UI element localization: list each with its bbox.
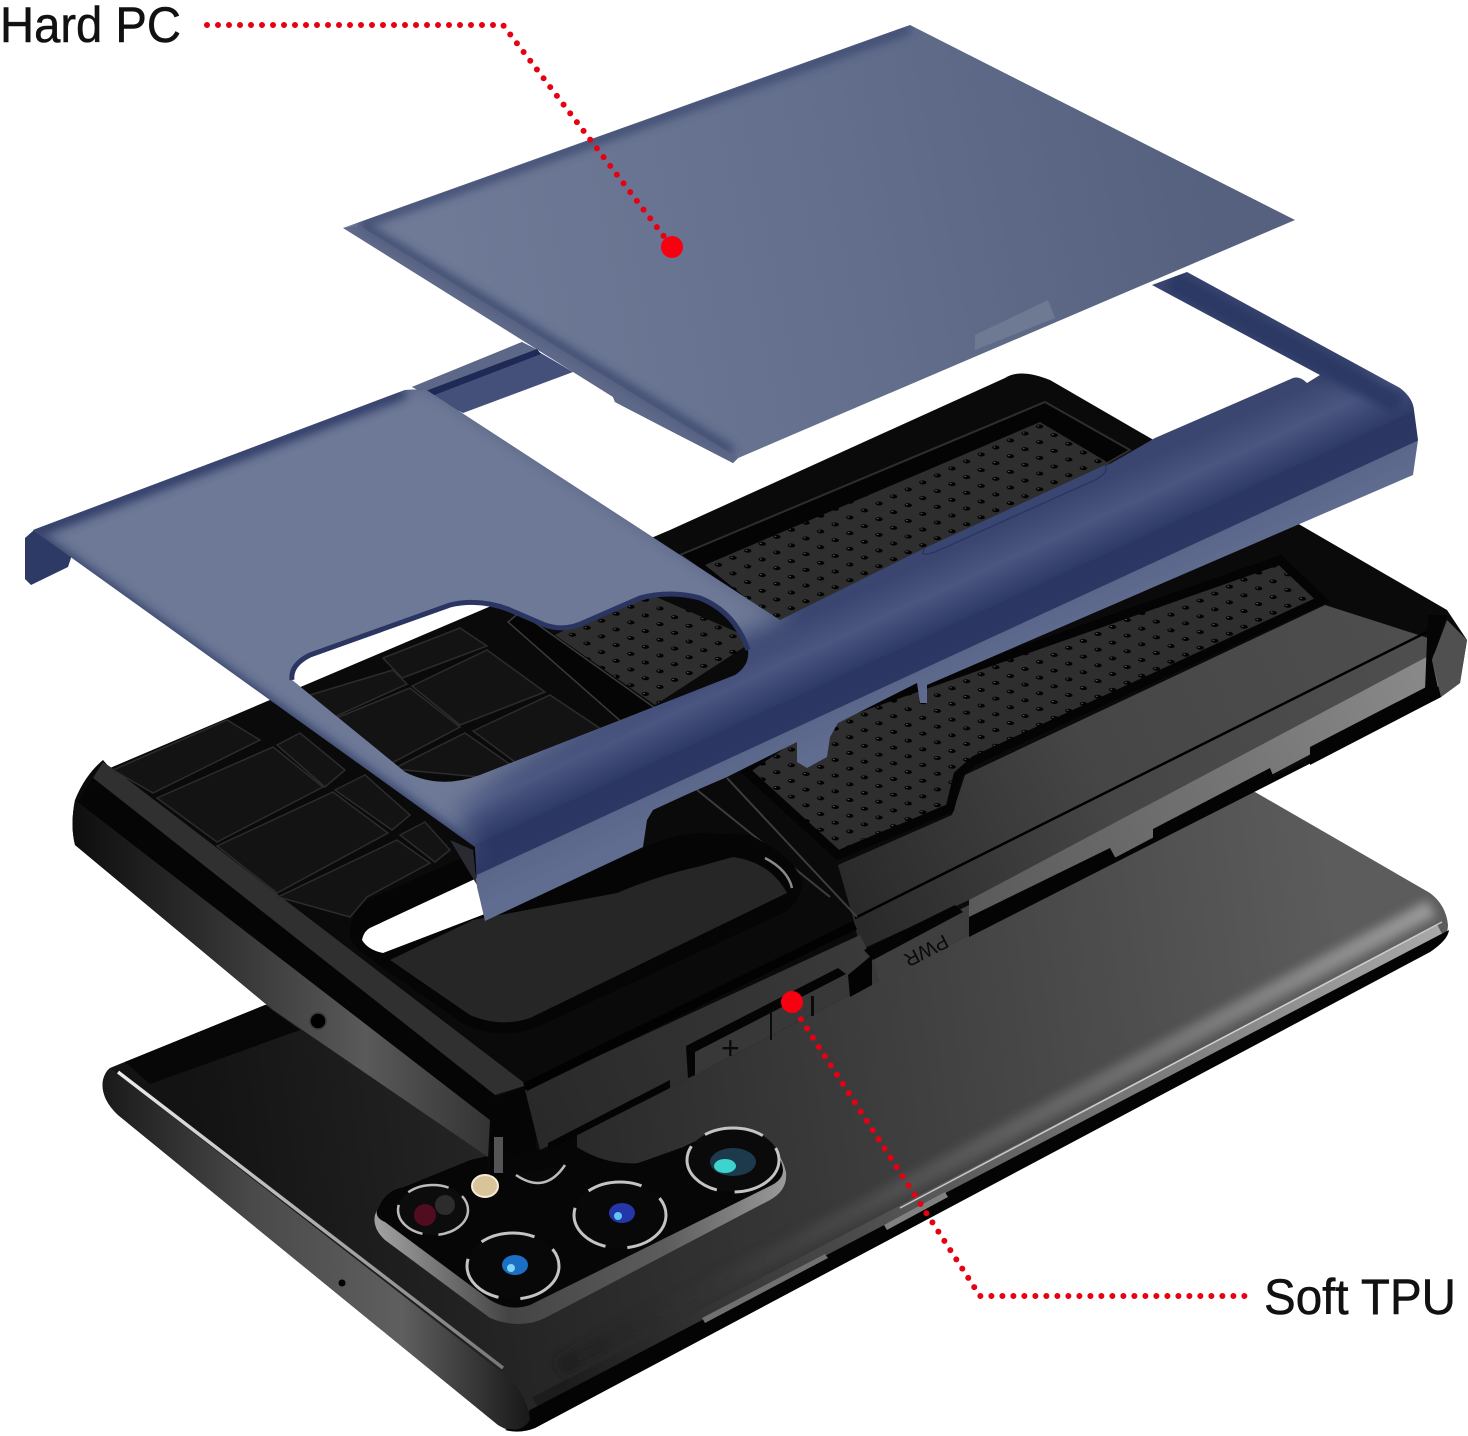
shell base <box>33 272 1418 921</box>
power button <box>848 905 968 997</box>
phone soft rim glow <box>560 908 1432 1368</box>
callout dot: hard PC <box>661 236 683 258</box>
shell light block face <box>20 280 1400 860</box>
phone rim glint <box>900 922 1442 1208</box>
volume button <box>686 968 850 1078</box>
lens: middle <box>574 1182 666 1248</box>
arm dark shade <box>1170 280 1400 405</box>
TPU side wall dark part <box>525 905 969 1150</box>
Hard PC callout leader <box>207 25 683 258</box>
TPU right corner bumper <box>1432 620 1467 697</box>
module top plate <box>377 1132 783 1308</box>
lens: teal telephoto <box>687 1128 779 1192</box>
compartment grid <box>113 628 601 917</box>
TPU side slots <box>548 684 1441 1150</box>
phone edge highlight <box>118 1072 503 1368</box>
phone long rim band <box>535 930 1440 1402</box>
phone body <box>103 792 1449 1432</box>
mesh panel upper <box>705 422 1112 625</box>
TPU left wall lit face <box>72 800 490 1157</box>
PWR label: PWR <box>900 930 952 970</box>
TPU headphone jack hole <box>310 1013 326 1029</box>
TPU side wall light band <box>969 653 1447 935</box>
TPU interior <box>118 385 1430 1082</box>
lens: partly hidden <box>516 1165 565 1183</box>
phone side button low <box>702 1254 828 1323</box>
module silver rim <box>374 1132 786 1324</box>
camera flash <box>472 1175 498 1197</box>
lens: red sensor <box>398 1185 468 1235</box>
groove lines <box>697 778 857 917</box>
TPU left wall black band <box>78 778 495 1120</box>
cover finger notch <box>975 300 1055 350</box>
cover left strip <box>343 226 738 463</box>
volume plus: + <box>721 1030 740 1066</box>
mesh panel camera side <box>555 590 755 705</box>
callout dot: soft TPU <box>781 991 803 1013</box>
TPU top pocket frame <box>680 402 1130 640</box>
camera module <box>374 1128 786 1324</box>
block top edge shade <box>33 392 405 532</box>
shell rear rail <box>412 342 573 413</box>
cover top edge shade <box>360 28 910 224</box>
phone side button high <box>884 1192 948 1230</box>
label: Soft TPU: Soft TPU <box>1264 1269 1456 1325</box>
Hard PC card cover <box>343 25 1295 463</box>
Hard PC outer shell <box>20 272 1418 921</box>
camera opening ring <box>350 833 802 1033</box>
TPU corner pillar <box>490 1085 536 1178</box>
TPU floor right <box>838 605 1434 950</box>
pocket groove by camera <box>508 612 655 725</box>
ring highlight <box>765 858 792 888</box>
shell groove <box>923 465 1106 554</box>
TPU left wall top band <box>93 762 527 1095</box>
cover underside edge <box>613 270 1160 463</box>
camera opening white gap <box>362 878 490 953</box>
shell left flange <box>25 530 72 585</box>
shell corner facet <box>450 840 477 885</box>
mesh panel lower <box>745 560 1322 855</box>
phone bottom edge black <box>505 930 1449 1432</box>
shell camera cutout edge <box>292 594 748 680</box>
TPU inner case <box>72 373 1467 1178</box>
camera opening floor <box>390 857 787 1022</box>
lens: wide <box>467 1233 559 1299</box>
phone end face <box>103 1068 530 1429</box>
block left edge shade <box>35 535 472 848</box>
volume minus <box>811 996 814 1016</box>
phone microphone hole <box>338 1280 346 1286</box>
cover left bevel shade <box>362 226 733 452</box>
Soft TPU callout leader <box>781 991 1248 1296</box>
